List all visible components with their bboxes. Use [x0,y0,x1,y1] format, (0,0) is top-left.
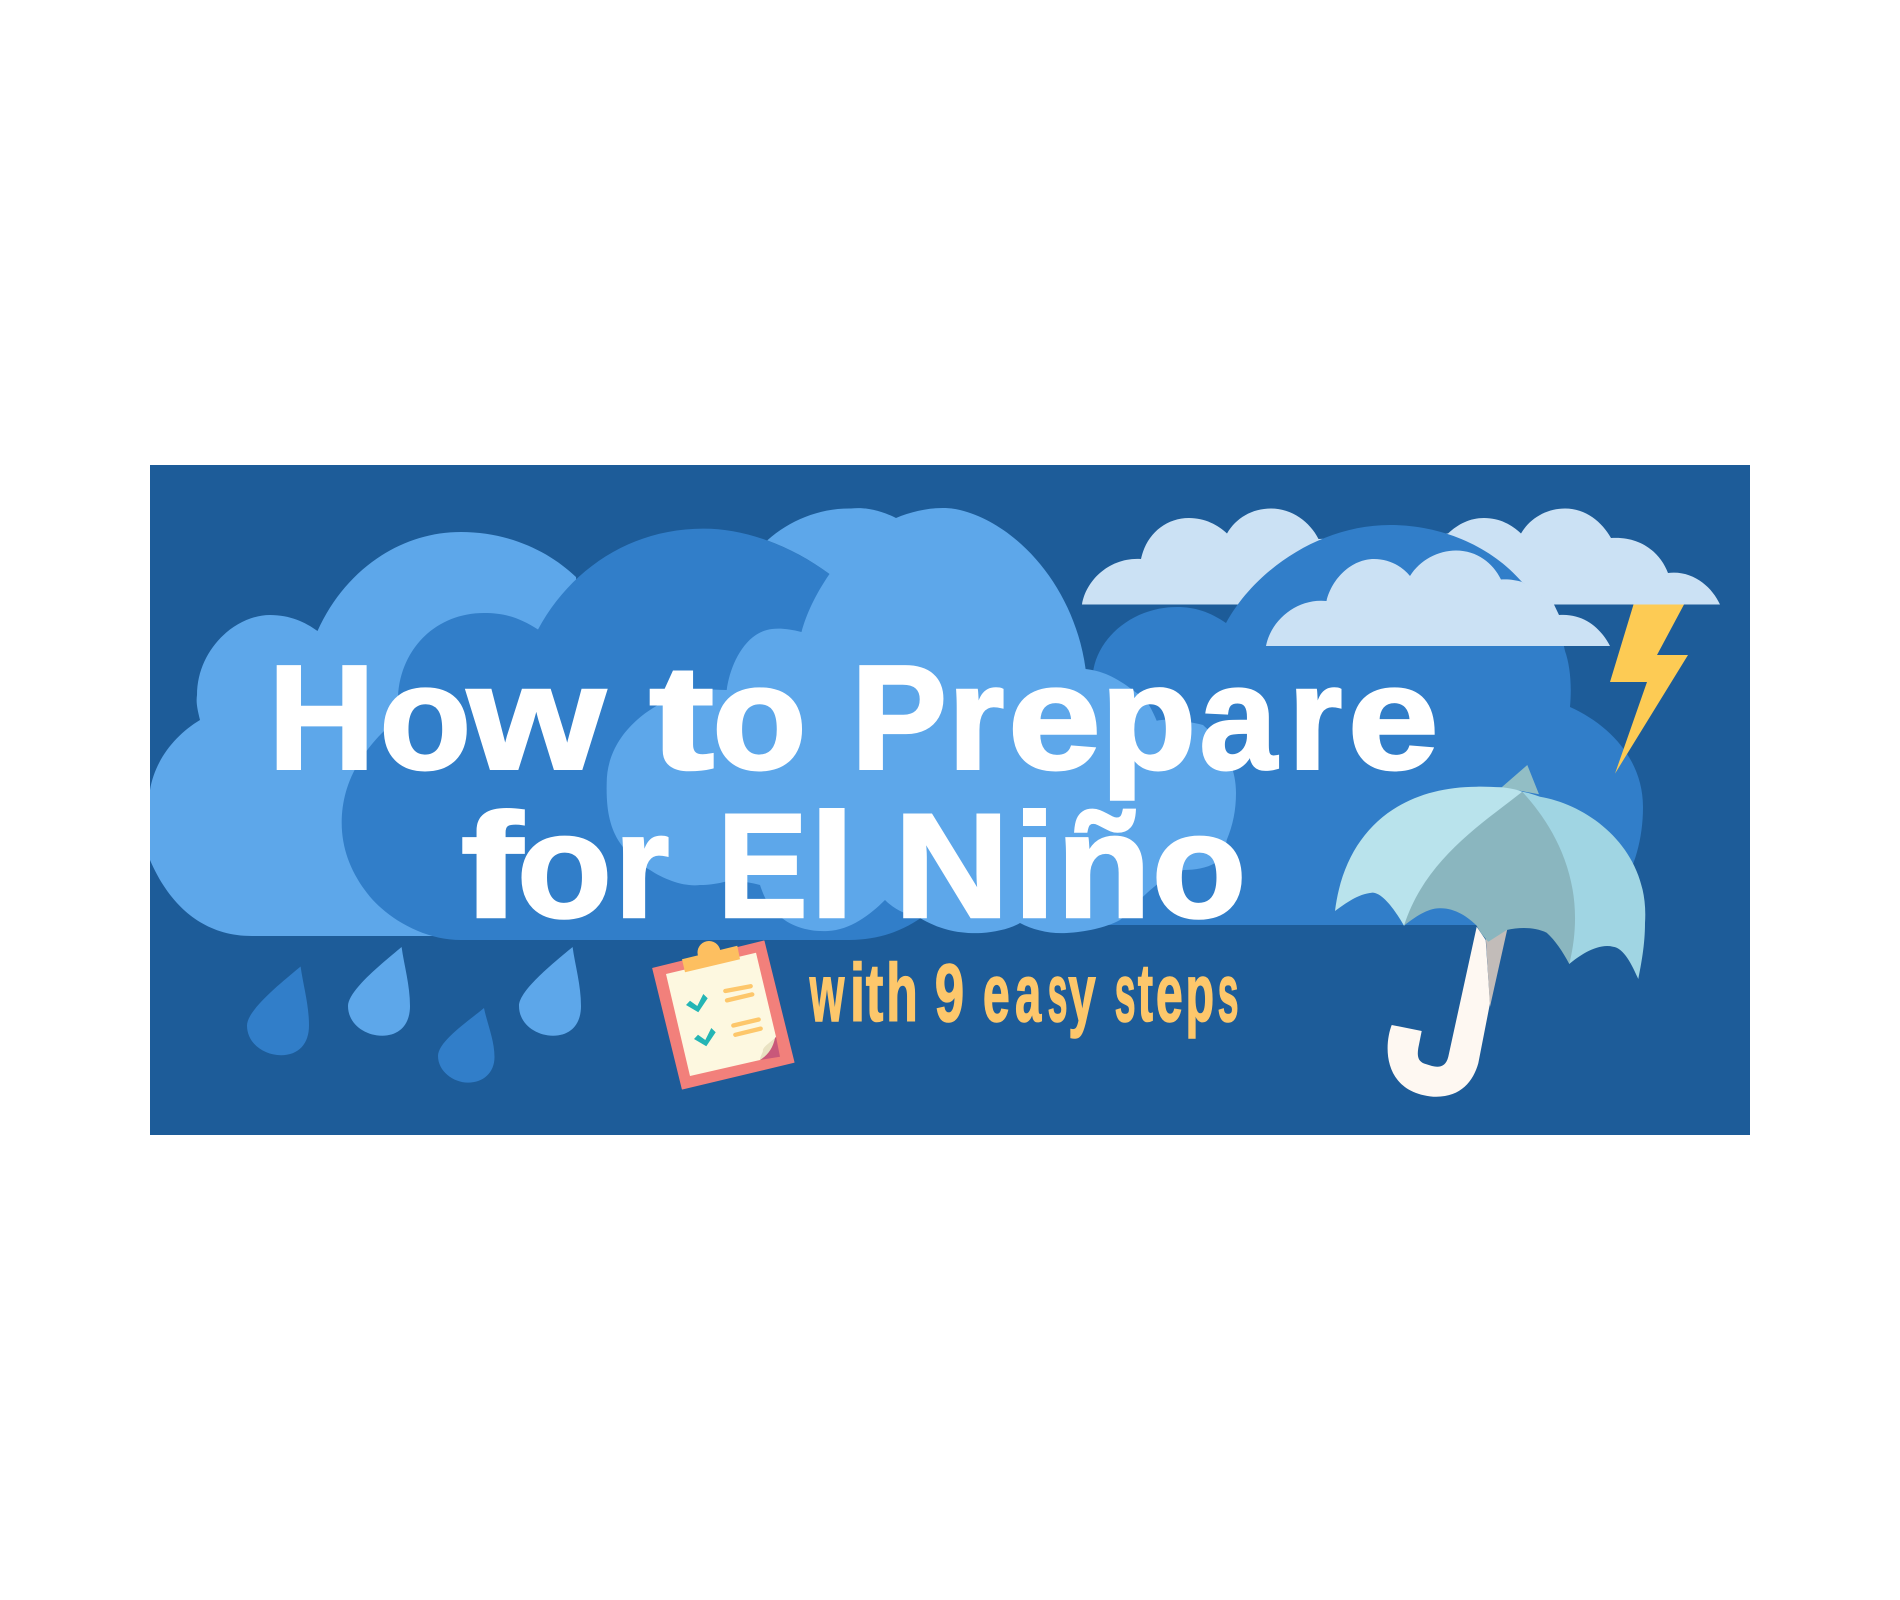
check mark 2 [694,1028,716,1046]
check mark 1 [686,994,708,1012]
subtitle: p [1186,948,1214,1039]
subtitle: h [886,948,918,1039]
title line 1: r [948,636,1004,800]
title line 1: r [1288,636,1342,800]
subtitle: y [1068,948,1096,1039]
subtitle: e [1156,948,1183,1039]
title line 2: ñ [1057,784,1151,949]
drop 4 [519,947,581,1036]
list lines [725,986,761,1035]
icon: rain drops [247,947,581,1083]
title line 1: t [649,636,714,800]
umbrella handle [1388,927,1490,1097]
title line 1: o [712,636,806,800]
title line 1: p [1101,636,1196,800]
subtitle: t [1138,948,1153,1039]
umbrella canopy right panel [1522,792,1645,979]
subtitle: a [1015,948,1042,1039]
text: s [1218,948,1239,1039]
umbrella canopy centre panel [1404,792,1575,964]
title line 2: o [517,784,612,949]
title [268,636,1439,949]
clipboard board [653,941,794,1089]
title line 1: a [1200,636,1278,800]
icon: clipboard [653,941,794,1089]
title line 2: f [461,784,523,949]
title line 1: e [1348,636,1439,800]
pale cloud: front [1266,550,1610,646]
clipboard paper [666,953,776,1076]
title line 1: w [467,636,606,800]
drop 1 [247,966,309,1055]
large cloud: centre light [607,508,1236,933]
icon: lightning bolt [1610,604,1688,774]
illustration: clouds [150,508,1720,940]
title line 2: E [718,784,808,949]
title line 1: o [380,636,471,800]
subtitle: s [1115,948,1136,1039]
large cloud: left light [150,532,600,936]
pale cloud: back [1082,508,1720,604]
subtitle: e [983,948,1010,1039]
title line 2: r [615,784,669,949]
drop 2 [348,947,410,1036]
title line 1: H [268,636,375,800]
panel: blue banner background [150,465,1750,1135]
subtitle: 9 [935,948,964,1039]
subtitle: w [809,948,845,1039]
umbrella tip [1502,765,1539,794]
icon: umbrella [1335,765,1645,1097]
paper curl [760,1038,775,1060]
title line 1: e [1008,636,1101,800]
clipboard clip [682,941,740,972]
subtitle: s [1048,948,1068,1039]
umbrella canopy left panel [1335,787,1522,926]
title line 2: N [894,784,1009,949]
subtitle: i [850,948,865,1039]
paper fold [760,1037,780,1060]
title line 2: i [1014,784,1055,949]
title line 1: P [851,636,947,800]
title line 2: l [810,784,854,949]
subtitle: t [866,948,883,1039]
large cloud: middle dark [342,529,950,940]
umbrella shaft shadow [1486,926,1508,1007]
title line 2: o [1152,784,1246,949]
drop 3 [438,1008,494,1083]
large cloud: right dark [1060,525,1643,925]
